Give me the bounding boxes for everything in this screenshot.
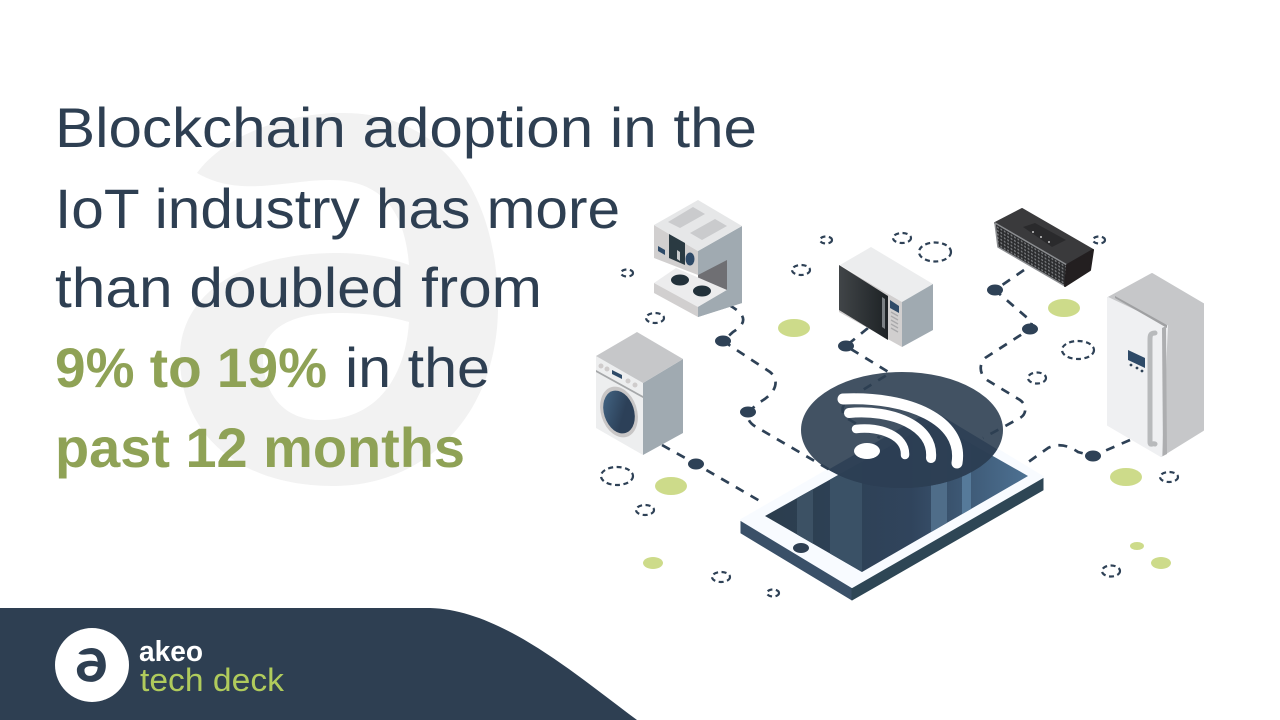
footer logo badge bbox=[55, 628, 129, 702]
connector: microwave to wifi bbox=[842, 328, 890, 438]
tablet bbox=[740, 456, 1044, 600]
footer band bbox=[0, 608, 637, 720]
headline: past 12 months bbox=[55, 416, 465, 479]
icon: microwave bbox=[839, 247, 933, 347]
icon: speaker bbox=[995, 209, 1093, 286]
footer brand text: tech deck bbox=[140, 662, 285, 698]
headline: in the bbox=[345, 336, 490, 399]
headline: 9% to 19% bbox=[55, 336, 327, 399]
icon: fridge bbox=[1108, 274, 1203, 456]
tablet screen bbox=[765, 456, 1028, 572]
headline: than doubled from bbox=[55, 256, 542, 319]
headline: Blockchain adoption in the bbox=[55, 96, 757, 159]
connector: speaker to wifi bbox=[981, 270, 1032, 438]
headline: IoT industry has more bbox=[55, 177, 620, 240]
connector nodes bbox=[688, 284, 1101, 470]
icon: wifi symbol bbox=[843, 399, 958, 463]
headline bbox=[55, 96, 757, 479]
connector: fridge to tablet bbox=[1027, 440, 1130, 463]
icon: coffee machine bbox=[654, 200, 742, 317]
connector: washer to tablet bbox=[662, 445, 765, 504]
decorative dashed rings bbox=[601, 233, 1178, 596]
wifi disc bbox=[801, 372, 1003, 488]
watermark logo bbox=[180, 113, 498, 486]
icon: washing machine bbox=[594, 332, 683, 455]
footer brand text: akeo bbox=[139, 636, 203, 668]
footer brand text bbox=[139, 636, 285, 698]
decorative green dots bbox=[643, 299, 1171, 569]
connector: coffee machine to tablet bbox=[723, 305, 830, 470]
